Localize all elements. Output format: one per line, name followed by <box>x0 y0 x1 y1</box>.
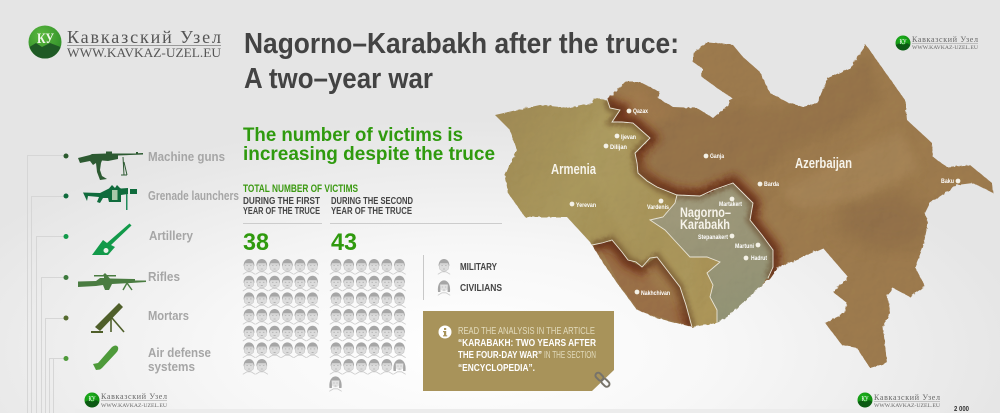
map: cities: Ganja <box>710 153 724 160</box>
weapon: mortars <box>64 303 189 333</box>
logo: Kavkazsky Uzel main <box>28 26 222 60</box>
victims heading: DURING THE FIRST <box>243 195 320 207</box>
map: cities: Ijevan <box>621 134 636 141</box>
map: cities: Qazax <box>633 108 648 115</box>
weapon: grenade launchers: Grenade launchers <box>148 189 239 203</box>
map: inner shade along border <box>592 99 773 327</box>
logo: top right: Кавказский Узел <box>912 35 978 44</box>
victims heading: YEAR OF THE TRUCE <box>331 205 412 217</box>
logo: bottom left <box>84 392 167 409</box>
number: second year: 43 <box>331 229 357 256</box>
callout: read the analysis: “ENCYCLOPEDIA”. <box>458 362 535 374</box>
title <box>244 28 679 95</box>
number: first year: 38 <box>243 229 269 256</box>
map: country labels <box>551 155 852 232</box>
map: cities: Martuni <box>735 243 754 250</box>
map: land silhouette <box>490 35 1000 375</box>
map: country labels: Azerbaijan <box>795 155 852 172</box>
callout: read the analysis: THE FOUR-DAY WAR” <box>458 349 542 361</box>
legend: MILITARY <box>460 262 497 273</box>
logo: top right: WWW.KAVKAZ-UZEL.EU <box>912 45 978 51</box>
weapon: air defense systems: systems <box>148 360 195 374</box>
weapon: air defense systems: Air defense <box>148 346 211 360</box>
weapon: machine guns <box>64 150 225 180</box>
map: crumpled paper texture <box>490 35 1000 375</box>
map: terrain shading <box>601 128 919 323</box>
icon: info <box>438 326 452 338</box>
logo: Kavkazsky Uzel main: Кавказский Узел <box>67 27 221 47</box>
victims heading <box>243 183 413 217</box>
weapon: grenade launchers <box>64 185 239 210</box>
map: red border glow <box>592 99 773 327</box>
weapon: air defense systems <box>64 346 211 374</box>
victims heading: DURING THE SECOND <box>331 195 413 207</box>
callout: read the analysis <box>423 311 614 391</box>
callout: read the analysis: “KARABAKH: TWO YEARS AFTER <box>458 337 596 349</box>
icon: chain link <box>594 372 611 388</box>
map: country labels: Armenia <box>551 161 596 178</box>
logo: Kavkazsky Uzel main: КУ <box>37 31 54 47</box>
map: cities: Hadrut <box>751 255 768 262</box>
weapon: artillery <box>64 224 193 255</box>
map: cities: Baku <box>941 178 954 185</box>
weapon: rifles <box>64 270 180 290</box>
subtitle: increasing despite the truce <box>243 143 495 165</box>
map: cities: Nakhchivan <box>641 290 670 297</box>
legend: CIVILIANS <box>460 283 502 294</box>
weapon: mortars: Mortars <box>148 309 189 323</box>
bottom rule <box>75 409 940 413</box>
subtitle: The number of victims is <box>243 124 463 146</box>
weapons tree lines <box>28 156 65 413</box>
map: country labels: Nagorno– <box>680 204 731 220</box>
logo: bottom right <box>858 392 940 409</box>
weapon: machine guns: Machine guns <box>148 150 225 164</box>
legend <box>423 255 502 300</box>
pictogram: first year victims <box>243 259 319 374</box>
map: Armenia and gold zone <box>495 98 773 327</box>
logo: bottom left: WWW.KAVKAZ-UZEL.EU <box>101 403 167 409</box>
map: country labels: Karabakh <box>680 216 730 232</box>
map <box>490 35 1000 375</box>
map: cities <box>570 108 960 297</box>
callout: read the analysis: IN THE SECTION <box>544 349 596 361</box>
logo: Kavkazsky Uzel main: WWW.KAVKAZ-UZEL.EU <box>67 45 222 60</box>
title: A two–year war <box>244 63 433 95</box>
map: cities: Dilijan <box>610 144 627 151</box>
logo: bottom left: КУ <box>88 395 96 403</box>
page total: 2 000 <box>954 404 969 413</box>
title: Nagorno–Karabakh after the truce: <box>244 28 679 60</box>
victims heading: YEAR OF THE TRUCE <box>243 205 320 217</box>
subtitle <box>243 124 495 165</box>
map: Nagorno-Karabakh zone <box>650 183 773 323</box>
logo: bottom right: WWW.KAVKAZ-UZEL.EU <box>874 403 940 409</box>
logo: top right <box>896 35 978 51</box>
pictogram: second year victims <box>329 259 406 391</box>
logo: bottom right: Кавказский Узел <box>874 393 940 402</box>
logo: bottom right: КУ <box>862 395 869 403</box>
map: white borders <box>592 99 773 327</box>
weapon: artillery: Artillery <box>149 229 193 243</box>
victims heading: TOTAL NUMBER OF VICTIMS <box>243 183 358 195</box>
map: cities: Yerevan <box>576 202 596 209</box>
logo: top right: КУ <box>900 38 907 46</box>
map: cities: Stepanakert <box>698 234 729 241</box>
map: cities: Martakert <box>719 201 743 208</box>
callout: read the analysis: READ THE ANALYSIS IN THE ARTICLE <box>458 325 595 337</box>
logo: bottom left: Кавказский Узел <box>101 392 167 401</box>
map: cities: Barda <box>764 181 779 188</box>
map: cities: Vardenis <box>647 204 669 211</box>
weapon: rifles: Rifles <box>148 270 180 284</box>
